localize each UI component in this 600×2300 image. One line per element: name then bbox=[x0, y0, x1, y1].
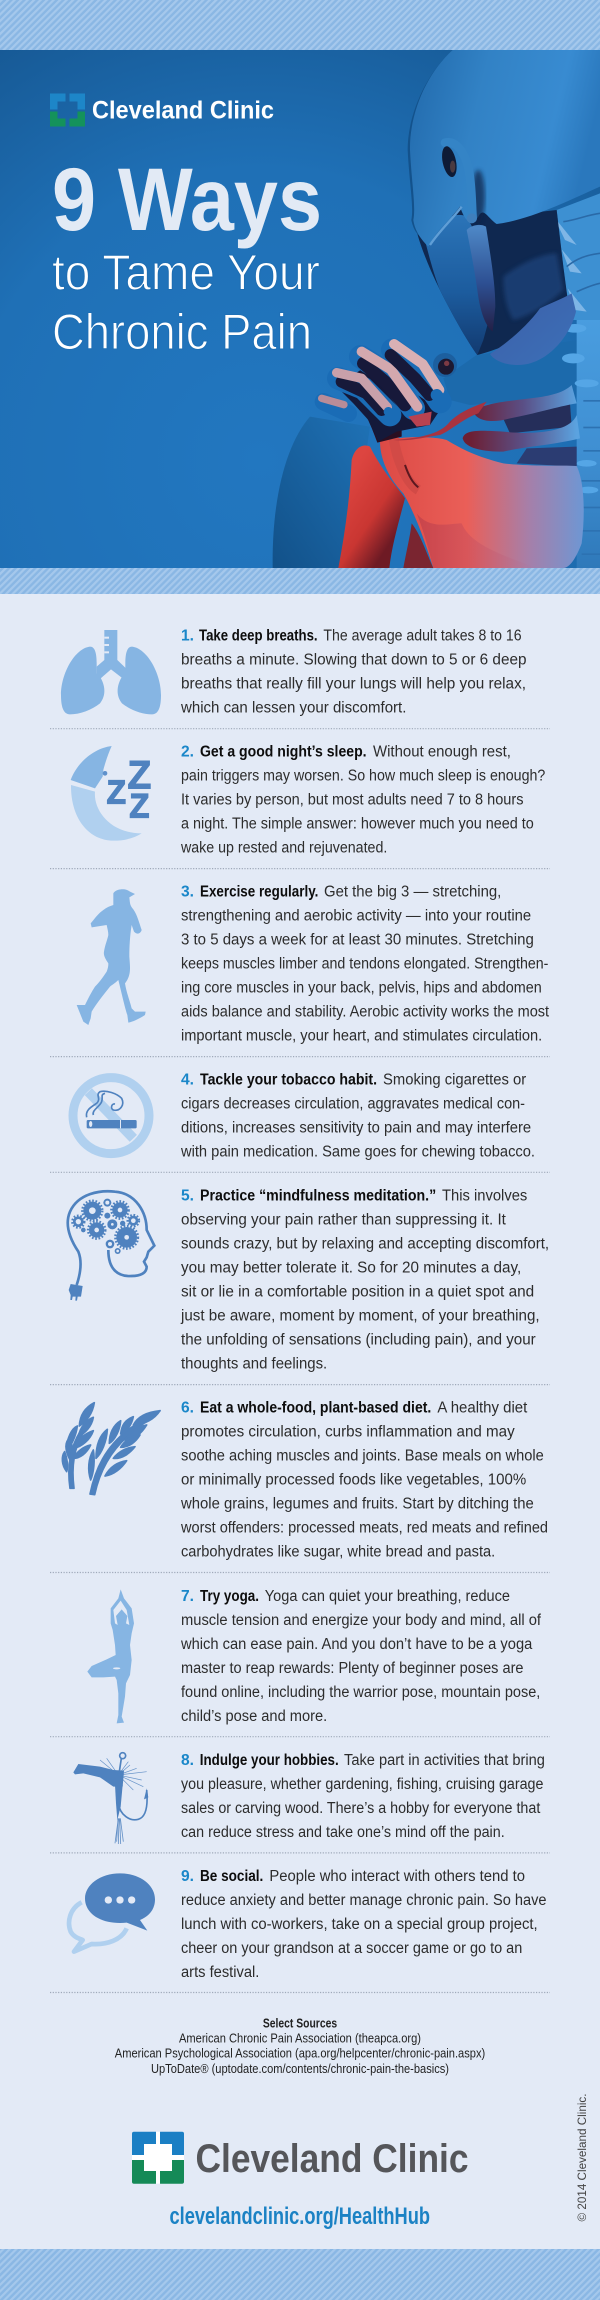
logo: Cleveland Clinic small bbox=[50, 94, 274, 126]
title: to Tame Your bbox=[52, 244, 320, 300]
text: tip 8: can reduce stress and take one’s mind off the pain. bbox=[181, 1824, 505, 1841]
panel: tip 4 bbox=[73, 1072, 535, 1160]
text: tip 4: with pain medication. Same goes for chewing tobacco. bbox=[180, 1144, 535, 1160]
website link: clevelandclinic.org/HealthHub bbox=[170, 2203, 430, 2230]
text: tip 6: soothe aching muscles and joints. Base meals on whole bbox=[181, 1448, 544, 1465]
panel: tip 3 bbox=[77, 884, 550, 1045]
panel: tip 6 bbox=[62, 1400, 548, 1561]
text: tip 9 bbox=[181, 1868, 546, 1981]
text: tip 2: pain triggers may worsen. So how much sleep is enough? bbox=[181, 768, 546, 785]
icon: head with gears bbox=[68, 1191, 154, 1301]
text: tip 4: ditions, increases sensitivity to pain and may interfere bbox=[181, 1120, 531, 1136]
sources text block: UpToDate® (uptodate.com/contents/chronic-pain-the-basics) bbox=[151, 2062, 449, 2076]
logo: Cleveland Clinic footer bbox=[132, 2132, 468, 2184]
text: tip 4: cigars decreases circulation, aggravates medical con- bbox=[181, 1096, 525, 1112]
text: tip 8: Indulge your hobbies. bbox=[200, 1752, 339, 1769]
logo: Cleveland Clinic small: Cleveland Clinic bbox=[92, 97, 274, 125]
text: tip 2: It varies by person, but most adults need 7 to 8 hours bbox=[181, 792, 524, 809]
text: tip 9: arts festival. bbox=[181, 1964, 259, 1981]
text: tip 6: or minimally processed foods like vegetables, 100% bbox=[181, 1472, 526, 1489]
text: tip 2: Without enough rest, bbox=[373, 744, 511, 761]
text: tip 9: cheer on your grandson at a soccer game or go to an bbox=[181, 1940, 522, 1957]
text: tip 3: 3. bbox=[181, 884, 194, 901]
text: tip 5: sit or lie in a comfortable position in a quiet spot and bbox=[181, 1284, 534, 1301]
text: tip 4: 4. bbox=[181, 1072, 194, 1088]
sources text block bbox=[115, 2016, 485, 2076]
logo: Cleveland Clinic footer: Cleveland Clinic bbox=[196, 2137, 468, 2181]
title bbox=[52, 149, 322, 360]
text: tip 6: worst offenders: processed meats, red meats and refined bbox=[180, 1520, 548, 1537]
sources text block: Select Sources bbox=[263, 2016, 337, 2030]
text: tip 5: the unfolding of sensations (including pain), and your bbox=[181, 1332, 536, 1349]
text: tip 9: Be social. bbox=[200, 1868, 263, 1885]
icon: no smoking bbox=[73, 1078, 149, 1154]
middle striped band bbox=[0, 568, 600, 594]
bottom striped band bbox=[0, 2249, 600, 2300]
text: tip 2: a night. The simple answer: however much you need to bbox=[181, 816, 534, 833]
text: tip 3: Exercise regularly. bbox=[200, 884, 318, 901]
text: tip 6: A healthy diet bbox=[437, 1400, 528, 1417]
text: tip 5: 5. bbox=[181, 1188, 194, 1205]
text: tip 1: breaths that really fill your lungs will help you relax, bbox=[181, 676, 526, 693]
text: tip 5 bbox=[180, 1188, 549, 1373]
text: tip 5: you may better tolerate it. So for 20 minutes a day, bbox=[181, 1260, 521, 1277]
icon: sleeping moon: Z bbox=[107, 774, 126, 811]
text: tip 7: found online, including the warrior pose, mountain pose, bbox=[181, 1684, 540, 1701]
panel: tip 8 bbox=[73, 1752, 545, 1844]
text: tip 1: breaths a minute. Slowing that down to 5 or 6 deep bbox=[181, 652, 526, 669]
hero panel bbox=[0, 50, 600, 568]
text: tip 7 bbox=[180, 1588, 542, 1725]
illustration: skeleton with painful shoulder bbox=[273, 50, 600, 568]
text: tip 6: carbohydrates like sugar, white bread and pasta. bbox=[181, 1544, 495, 1561]
text: tip 1: The average adult takes 8 to 16 bbox=[323, 628, 522, 645]
text: tip 4: Smoking cigarettes or bbox=[383, 1072, 526, 1088]
icon: yoga pose bbox=[87, 1589, 134, 1723]
icon: wheat bbox=[62, 1403, 160, 1495]
text: tip 7: Yoga can quiet your breathing, reduce bbox=[265, 1588, 510, 1605]
text: tip 9: People who interact with others tend to bbox=[269, 1868, 525, 1885]
text: tip 7: 7. bbox=[181, 1588, 194, 1605]
sources text block: American Psychological Association (apa.org/helpcenter/chronic-pain.aspx) bbox=[115, 2046, 485, 2060]
text: tip 8: Take part in activities that bring bbox=[344, 1752, 545, 1769]
text: tip 9: lunch with co-workers, take on a special group project, bbox=[181, 1916, 538, 1933]
text: tip 5: thoughts and feelings. bbox=[181, 1356, 327, 1373]
top striped band bbox=[0, 0, 600, 50]
text: tip 7: Try yoga. bbox=[200, 1588, 259, 1605]
text: tip 8: sales or carving wood. There’s a hobby for everyone that bbox=[181, 1800, 541, 1817]
text: tip 2: 2. bbox=[181, 744, 194, 761]
text: tip 5: This involves bbox=[442, 1188, 528, 1205]
text: tip 3: strengthening and aerobic activity — into your routine bbox=[181, 908, 531, 925]
text: tip 6 bbox=[180, 1400, 548, 1561]
panel: tip 2 bbox=[71, 744, 546, 857]
text: tip 6: 6. bbox=[181, 1400, 194, 1417]
copyright: © 2014 Cleveland Clinic. bbox=[575, 2094, 589, 2222]
text: tip 4 bbox=[180, 1072, 535, 1160]
panel: tip 7 bbox=[87, 1588, 542, 1725]
text: tip 6: promotes circulation, curbs inflammation and may bbox=[181, 1424, 515, 1441]
panel: tip 1 bbox=[61, 628, 527, 717]
title: Chronic Pain bbox=[52, 304, 312, 360]
text: tip 5: sounds crazy, but by relaxing and accepting discomfort, bbox=[181, 1236, 549, 1253]
text: tip 9: reduce anxiety and better manage chronic pain. So have bbox=[181, 1892, 546, 1909]
text: tip 8: you pleasure, whether gardening, fishing, cruising garage bbox=[181, 1776, 543, 1793]
panel: tip 9 bbox=[69, 1868, 546, 1981]
text: tip 8: 8. bbox=[181, 1752, 194, 1769]
text: tip 2: wake up rested and rejuvenated. bbox=[180, 840, 387, 857]
text: tip 2: Get a good night’s sleep. bbox=[200, 744, 367, 761]
icon: sleeping moon: Z bbox=[129, 788, 149, 826]
icon: lungs bbox=[61, 630, 161, 714]
text: tip 9: 9. bbox=[181, 1868, 194, 1885]
text: tip 5: just be aware, moment by moment, of your breathing, bbox=[180, 1308, 540, 1325]
text: tip 2 bbox=[180, 744, 546, 857]
text: tip 3: Get the big 3 — stretching, bbox=[324, 884, 501, 901]
icon: runner bbox=[77, 889, 146, 1025]
text: tip 1: Take deep breaths. bbox=[199, 628, 318, 645]
text: tip 1: which can lessen your discomfort. bbox=[180, 700, 406, 717]
icon: sleeping moon bbox=[71, 746, 151, 841]
icon: fishing fly bbox=[73, 1753, 148, 1844]
text: tip 8 bbox=[181, 1752, 545, 1841]
text: tip 4: Tackle your tobacco habit. bbox=[200, 1072, 377, 1088]
title: 9 Ways bbox=[52, 149, 322, 249]
text: tip 3: important muscle, your heart, and stimulates circulation. bbox=[181, 1028, 542, 1045]
text: tip 1: 1. bbox=[181, 628, 194, 645]
text: tip 5: observing your pain rather than suppressing it. It bbox=[181, 1212, 507, 1229]
text: tip 6: whole grains, legumes and fruits. Start by ditching the bbox=[180, 1496, 534, 1513]
text: tip 5: Practice “mindfulness meditation.” bbox=[200, 1188, 436, 1205]
panel: tip 5 bbox=[68, 1188, 549, 1373]
icon: speech bubbles bbox=[69, 1873, 155, 1952]
text: tip 1 bbox=[180, 628, 526, 717]
text: tip 6: Eat a whole-food, plant-based diet. bbox=[200, 1400, 431, 1417]
text: tip 3: aids balance and stability. Aerobic activity works the most bbox=[181, 1004, 550, 1021]
text: tip 7: master to reap rewards: Plenty of beginner poses are bbox=[181, 1660, 524, 1677]
text: tip 7: child’s pose and more. bbox=[181, 1708, 327, 1725]
text: tip 3: 3 to 5 days a week for at least 30 minutes. Stretching bbox=[181, 932, 534, 949]
text: tip 3 bbox=[181, 884, 550, 1045]
text: tip 7: which can ease pain. And you don’t have to be a yoga bbox=[180, 1636, 533, 1653]
sources text block: American Chronic Pain Association (theapca.org) bbox=[179, 2032, 421, 2046]
text: tip 7: muscle tension and energize your body and mind, all of bbox=[181, 1612, 542, 1629]
text: tip 3: ing core muscles in your back, pelvis, hips and abdomen bbox=[181, 980, 542, 997]
icon: sleeping moon: Z bbox=[127, 753, 151, 797]
text: tip 3: keeps muscles limber and tendons elongated. Strengthen- bbox=[181, 956, 548, 973]
